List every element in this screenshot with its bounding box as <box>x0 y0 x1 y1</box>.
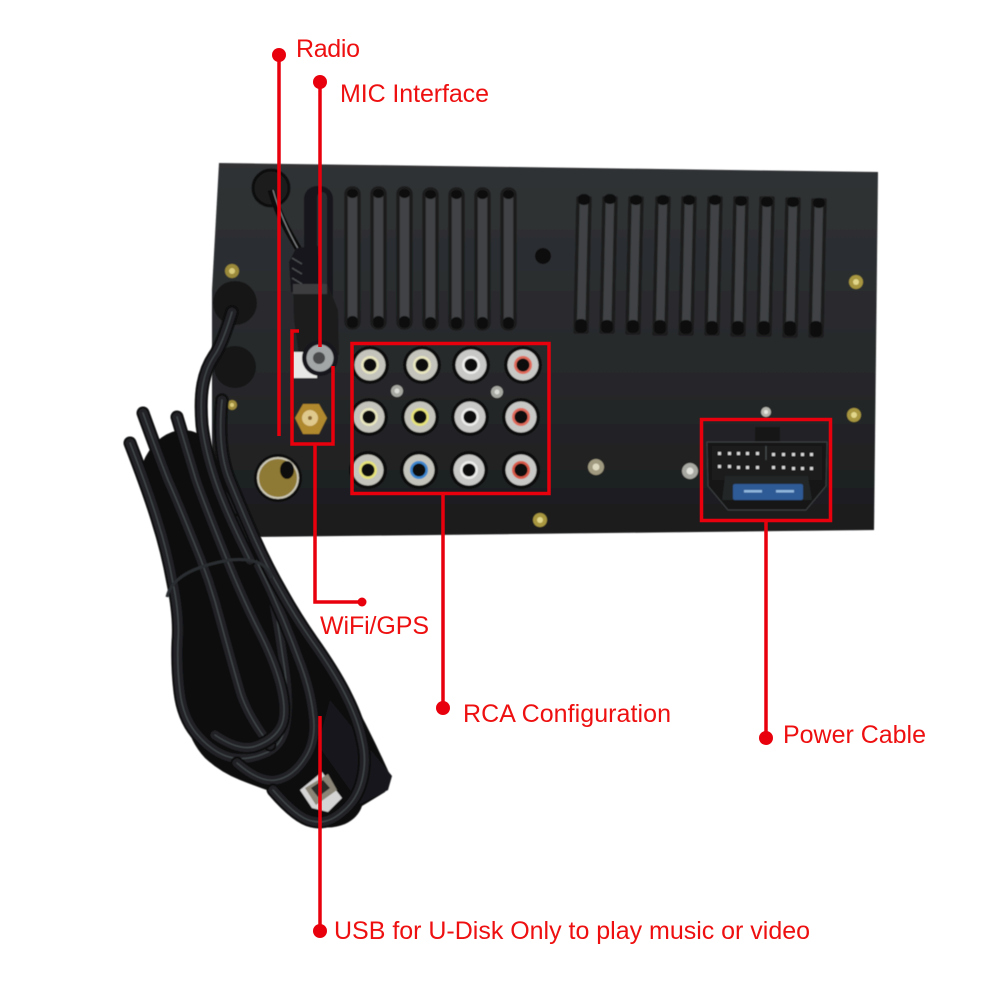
callout: MIC Interface <box>313 75 489 347</box>
cable bundle <box>130 312 392 828</box>
callout: MIC Interface: MIC Interface <box>340 80 489 108</box>
callout: Radio: Radio <box>296 35 360 63</box>
jack: MIC socket <box>302 340 338 376</box>
callout: WiFi/GPS: WiFi/GPS <box>320 612 429 640</box>
callout: USB <box>313 716 810 945</box>
microphone lead and plug <box>271 186 339 362</box>
power connector <box>707 427 827 510</box>
RCA jacks <box>349 346 542 489</box>
white connector <box>293 352 317 378</box>
cable tie <box>167 560 272 597</box>
callout: WiFi/GPS <box>292 331 429 640</box>
callout: Radio <box>272 35 360 436</box>
screws <box>225 264 863 527</box>
antenna socket <box>254 454 302 502</box>
USB connector block <box>318 700 392 804</box>
grommets <box>213 170 289 388</box>
SMA antenna connector <box>295 404 327 434</box>
callout: Power Cable <box>702 420 926 749</box>
panel hole <box>535 248 551 264</box>
bundle silhouette <box>140 430 390 828</box>
panel: metal housing <box>212 163 878 537</box>
callout: RCA Configuration: RCA Configuration <box>463 700 671 728</box>
callout: RCA Configuration <box>352 344 671 728</box>
cable strands <box>130 312 364 822</box>
callout: USB: USB for U-Disk Only to play music or video <box>334 917 810 945</box>
white gap and USB plug <box>300 772 342 812</box>
callout: Power Cable: Power Cable <box>783 721 926 749</box>
right vent group <box>575 194 825 337</box>
device rear panel <box>212 163 878 537</box>
left vent group <box>346 188 515 329</box>
